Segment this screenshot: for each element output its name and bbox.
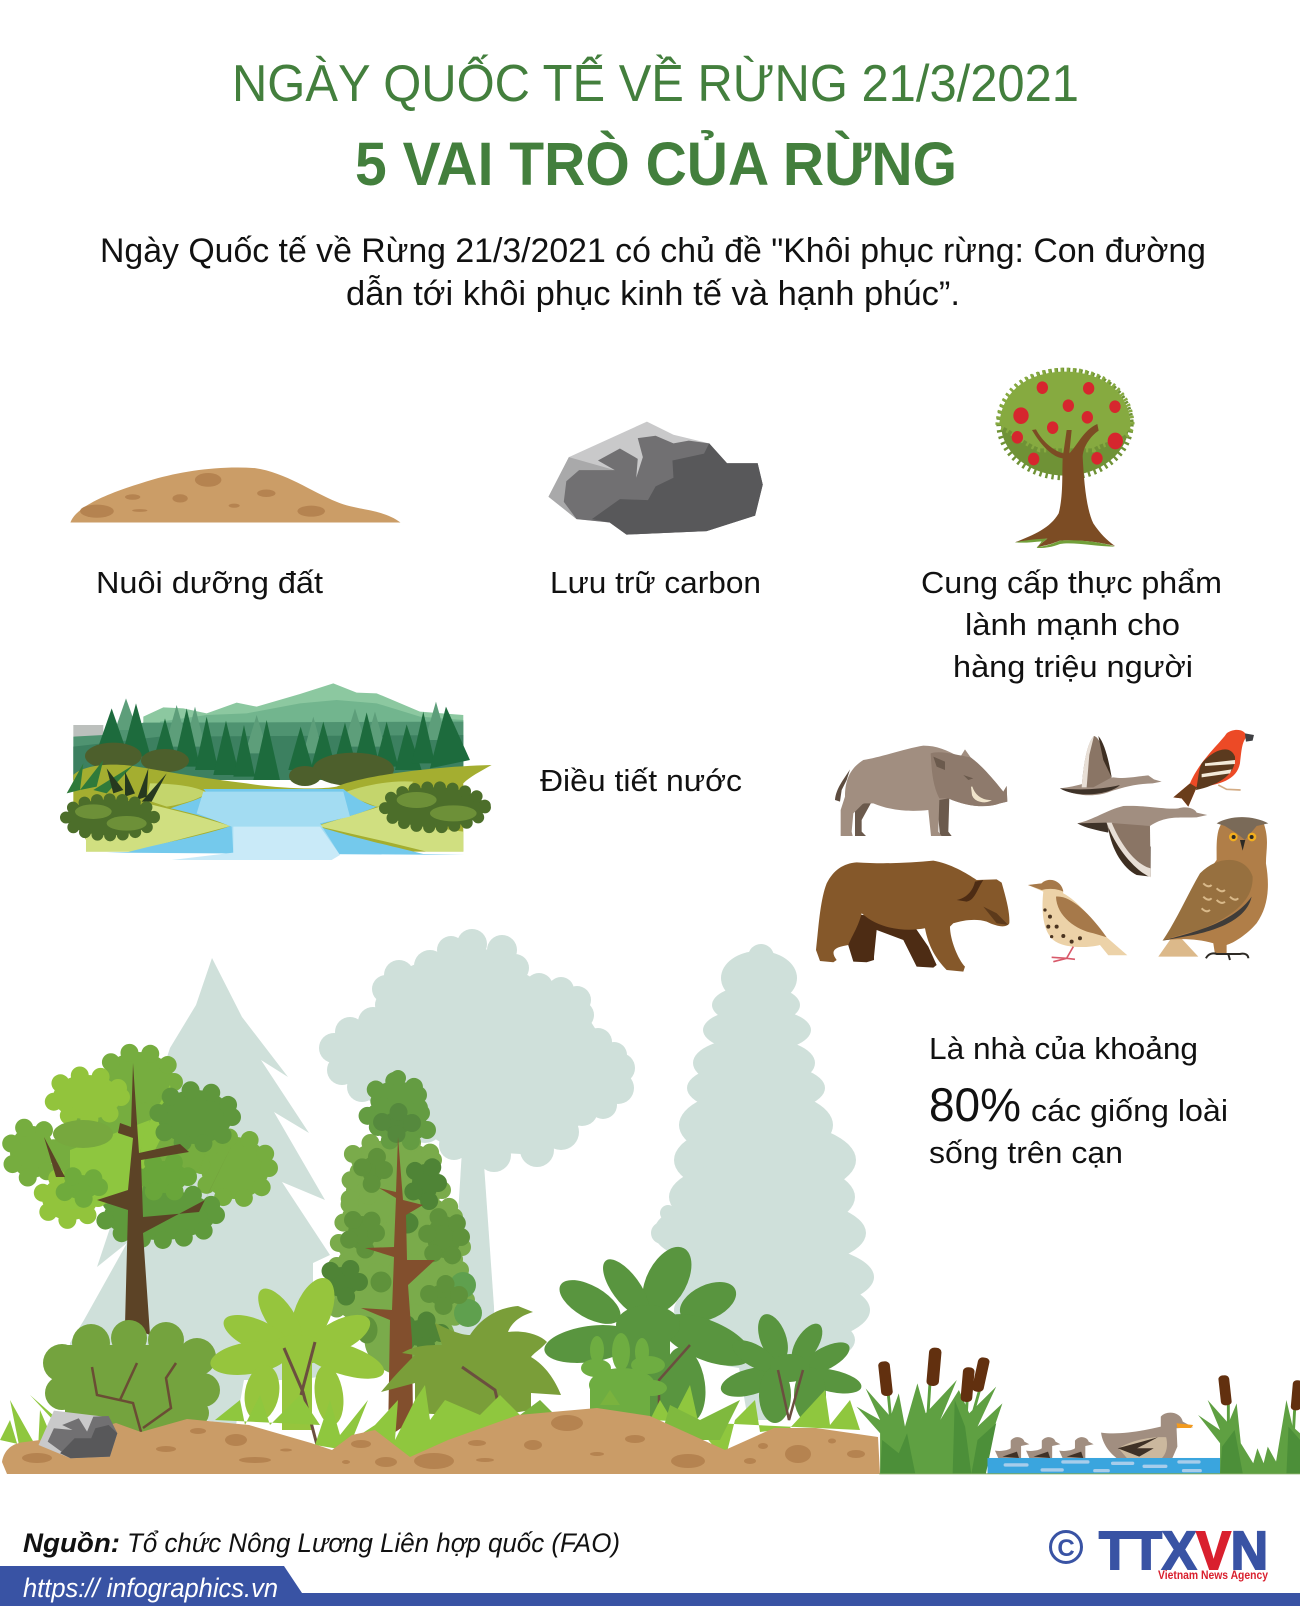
label: carbon: Lưu trữ carbon — [550, 565, 761, 600]
intro text: dẫn tới khôi phục kinh tế và hạnh phúc”. — [346, 275, 960, 313]
text: 80 percent habitat: các giống loài — [1031, 1093, 1228, 1128]
icon: goose flying up — [1060, 736, 1162, 795]
reeds: right cluster with cattails — [879, 1375, 1300, 1474]
icon: owl — [1158, 817, 1268, 960]
label: food: hàng triệu người — [953, 649, 1193, 684]
intro text — [100, 232, 1206, 313]
pond with ducks — [987, 1413, 1220, 1474]
icon: soil mound — [70, 468, 401, 523]
label: soil: Nuôi dưỡng đất — [96, 565, 323, 600]
palm: dark green large — [542, 1239, 758, 1425]
text: 80 percent habitat: sống trên cạn — [929, 1135, 1123, 1170]
background tree: tall poplar — [651, 944, 874, 1420]
icon: thrush — [1028, 880, 1127, 962]
text: 80 percent habitat — [929, 1031, 1228, 1170]
footer bar with URL tab — [0, 1566, 1300, 1606]
icon: carbon rock — [548, 422, 763, 535]
icon: red crossbill — [1173, 730, 1254, 807]
logo: copyright and TTXVN: C — [1057, 1535, 1075, 1562]
intro text: Ngày Quốc tế về Rừng 21/3/2021 có chủ đề "Khôi phục rừng: Con đường — [100, 232, 1206, 270]
background tree: pine — [70, 958, 330, 1425]
logo: copyright and TTXVN: Vietnam News Agency — [1158, 1568, 1268, 1582]
icon: goose flying down — [1077, 806, 1207, 877]
label: food: lành mạnh cho — [965, 607, 1180, 642]
footer bar with URL tab: https:// infographics.vn — [23, 1573, 278, 1603]
text: 80 percent habitat: 80% — [929, 1078, 1021, 1131]
ground: soil strip — [2, 1408, 880, 1474]
text: 80 percent habitat: Là nhà của khoảng — [929, 1031, 1198, 1066]
label: food: Cung cấp thực phẩm — [921, 565, 1222, 600]
tree: tall centre — [325, 1070, 482, 1437]
palm: light green — [208, 1272, 388, 1445]
palm: right green — [718, 1310, 864, 1423]
palm: olive — [381, 1306, 561, 1420]
background tree: round canopy — [319, 929, 635, 1425]
reeds: left cluster with cattails — [856, 1347, 1002, 1474]
label: food — [921, 565, 1222, 684]
palm: small mid green — [581, 1333, 667, 1420]
grass: along the ground — [0, 1385, 860, 1460]
title: main heading: 5 VAI TRÒ CỦA RỪNG — [355, 130, 957, 198]
icon: brown bear — [816, 861, 1009, 972]
logo: copyright and TTXVN: TTXVN — [1099, 1521, 1268, 1581]
label: water: Điều tiết nước — [540, 763, 742, 798]
title: date line: NGÀY QUỐC TẾ VỀ RỪNG 21/3/2021 — [232, 54, 1079, 113]
icon: apple tree — [999, 372, 1131, 548]
icon: wild boar — [835, 746, 1007, 836]
source note: Nguồn: — [23, 1528, 120, 1558]
icon: river landscape — [66, 683, 492, 860]
bush: left — [43, 1320, 220, 1435]
source note: Tổ chức Nông Lương Liên hợp quốc (FAO) — [127, 1528, 620, 1558]
icon: small rock — [39, 1411, 117, 1458]
tree: left broadleaf — [10, 1052, 269, 1335]
